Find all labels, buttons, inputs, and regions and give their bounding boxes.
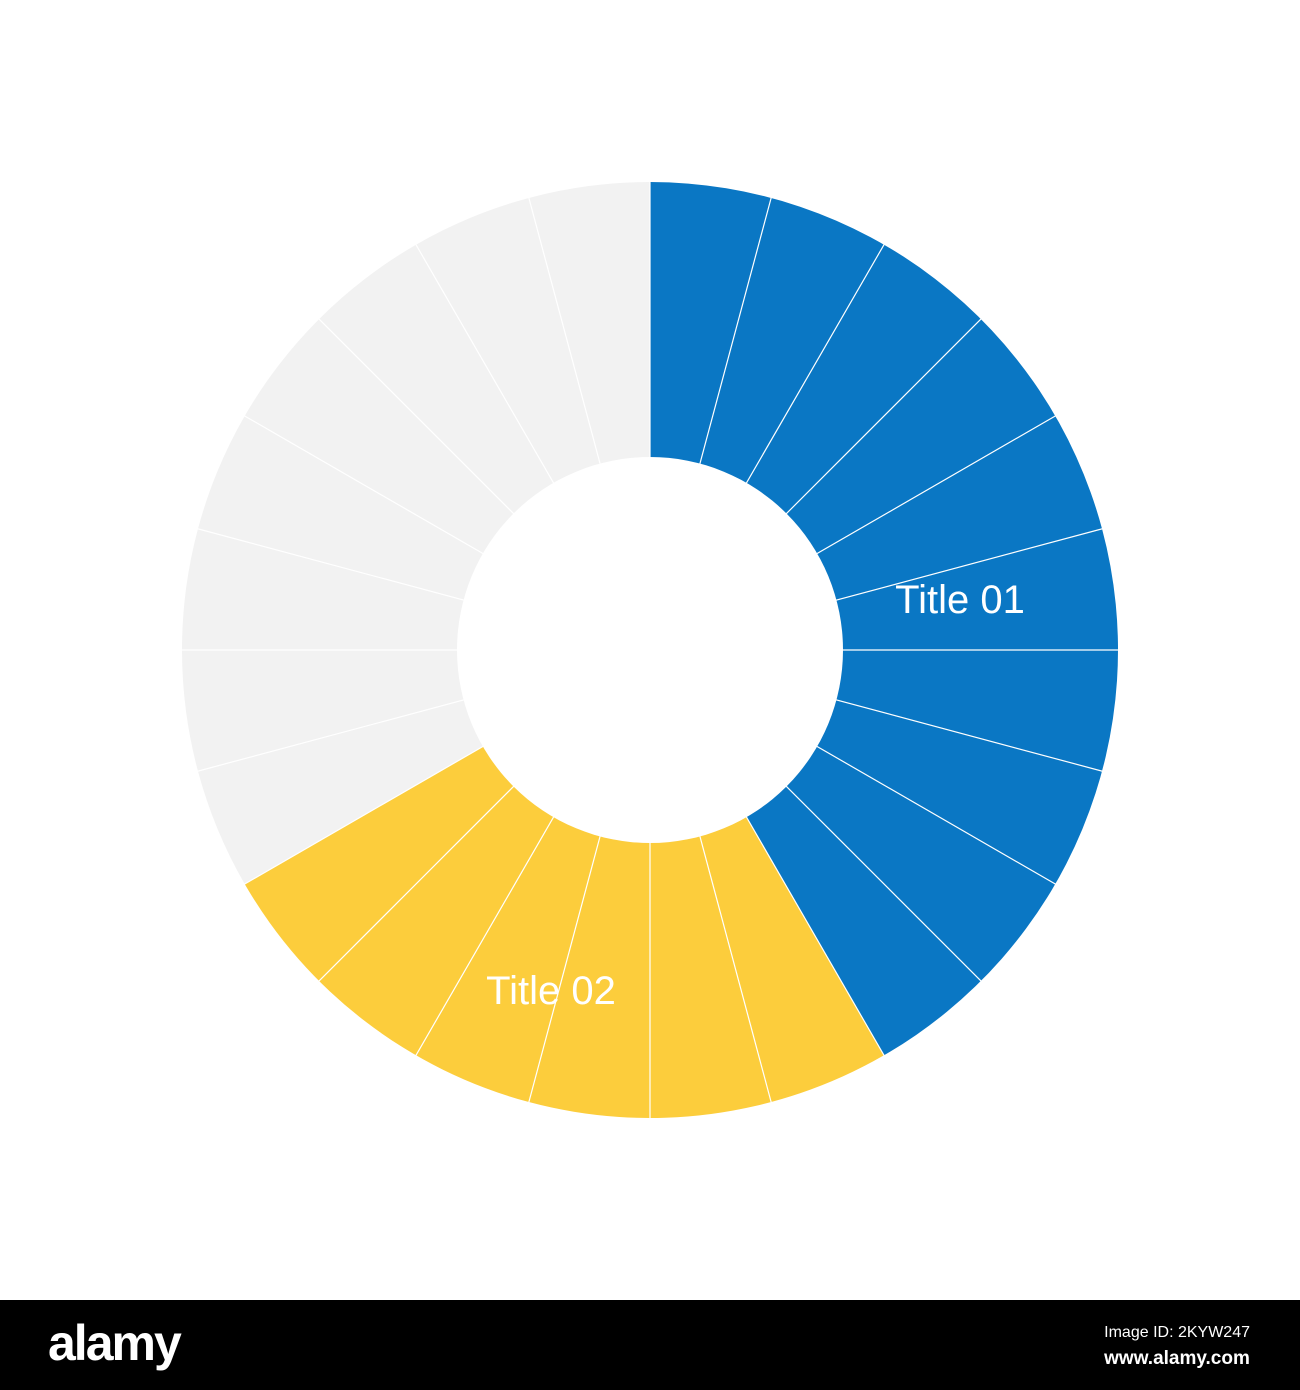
footer bar	[0, 1300, 1300, 1390]
donut hole	[457, 457, 843, 843]
image id text: www.alamy.com	[1104, 1348, 1250, 1369]
segment: yellow Title 02	[245, 650, 884, 1118]
label: Title 02: Title 02	[486, 969, 616, 1013]
segment: blue Title 01	[650, 182, 1118, 1055]
image id text	[1104, 1324, 1250, 1369]
logo: alamy: alamy	[48, 1315, 180, 1371]
image id text: Image ID: 2KYW247	[1104, 1324, 1250, 1341]
label: Title 01: Title 01	[895, 578, 1025, 622]
segment: grey remainder	[182, 182, 650, 884]
